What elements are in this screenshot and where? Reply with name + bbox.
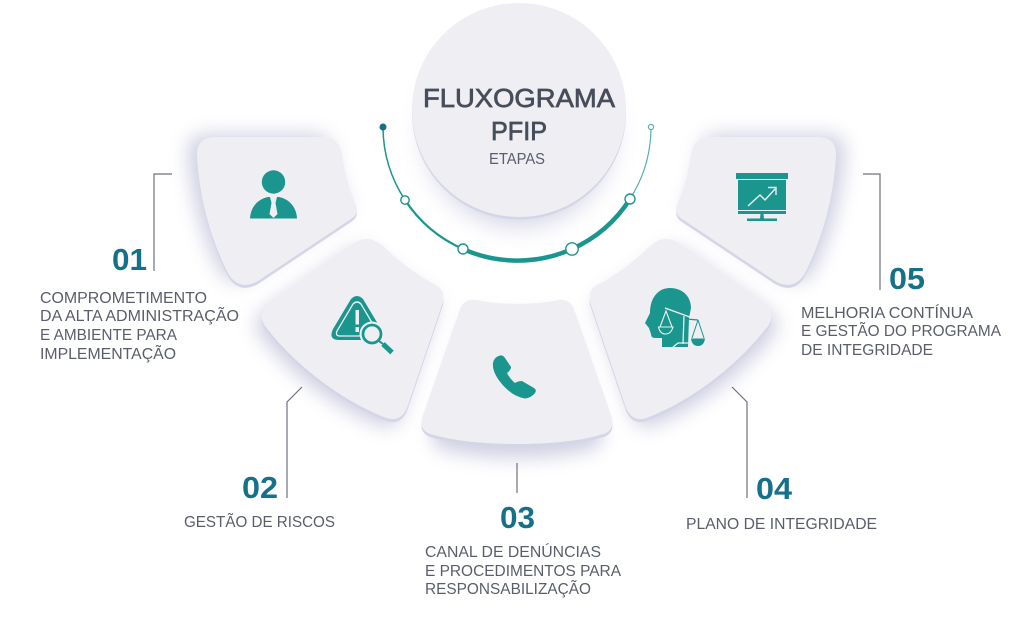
title — [423, 83, 616, 168]
icon: warning with magnifier — [331, 296, 392, 352]
step 03: E PROCEDIMENTOS PARA — [425, 563, 622, 580]
icon: phone — [493, 355, 536, 398]
step 02: GESTÃO DE RISCOS — [184, 514, 335, 531]
step 01: IMPLEMENTAÇÃO — [40, 346, 176, 363]
title: FLUXOGRAMA — [423, 83, 616, 113]
step 03: RESPONSABILIZAÇÃO — [425, 581, 591, 598]
title: ETAPAS — [489, 151, 545, 168]
step 02 — [184, 387, 335, 531]
step 03 — [425, 463, 622, 598]
step 05: 05 — [889, 261, 925, 296]
step 01: E AMBIENTE PARA — [40, 327, 178, 344]
step 01: COMPROMETIMENTO — [40, 290, 207, 307]
step 05: MELHORIA CONTÍNUA — [801, 305, 974, 322]
icon: person with tie — [250, 170, 297, 218]
panel 2: gestão de riscos — [256, 239, 443, 427]
title: PFIP — [491, 116, 547, 146]
step 01: DA ALTA ADMINISTRAÇÃO — [40, 308, 239, 325]
step 01: 01 — [112, 242, 147, 277]
step 05 — [801, 174, 1002, 359]
step 05: E GESTÃO DO PROGRAMA — [801, 323, 1002, 340]
step 04: 04 — [756, 471, 793, 506]
panel 1: comprometimento — [188, 134, 357, 288]
panel 5: melhoria contínua — [676, 134, 845, 288]
icon: head with scales — [645, 288, 705, 347]
step 01 — [40, 174, 239, 363]
step 05: DE INTEGRIDADE — [801, 342, 933, 359]
step 03: CANAL DE DENÚNCIAS — [425, 544, 601, 561]
icon: presentation chart — [736, 173, 788, 221]
progress arc — [380, 124, 654, 261]
panel 3: canal de denúncias — [422, 300, 612, 458]
step 04 — [686, 387, 877, 533]
step 03: 03 — [500, 500, 535, 535]
step 04: PLANO DE INTEGRIDADE — [686, 516, 877, 533]
step 02: 02 — [242, 470, 278, 505]
panel 4: plano de integridade — [590, 239, 777, 427]
center circle — [412, 3, 626, 226]
